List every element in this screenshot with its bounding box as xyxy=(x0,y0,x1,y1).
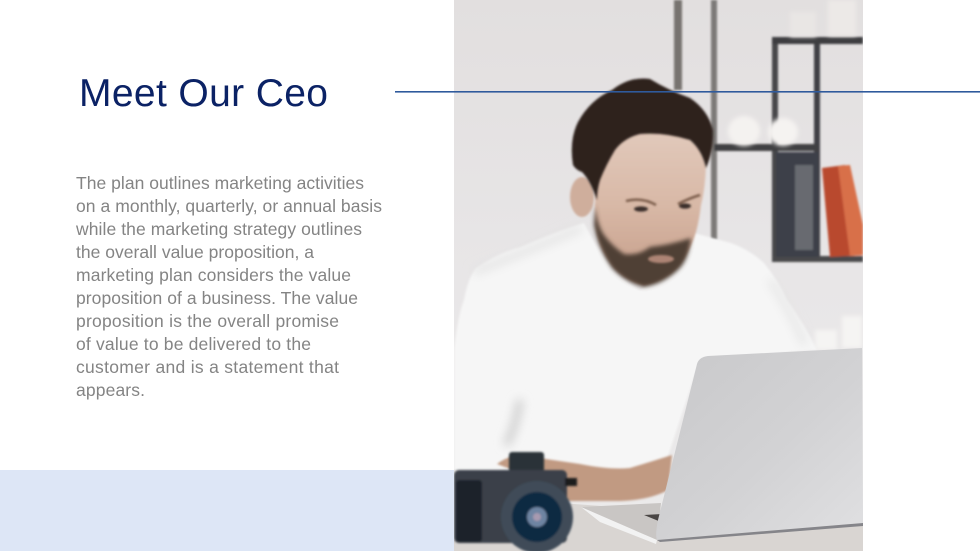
title: Meet Our Ceo xyxy=(79,72,328,115)
camera xyxy=(454,452,577,551)
body text: on a monthly, quarterly, or annual basis xyxy=(76,196,382,216)
body text: proposition is the overall promise xyxy=(76,311,339,331)
keyboard notch xyxy=(644,514,660,521)
sweater xyxy=(454,223,817,480)
forearm and hand xyxy=(497,455,672,501)
body text xyxy=(75,173,382,400)
eyes and brows xyxy=(626,195,700,212)
wall xyxy=(454,0,863,551)
shelf objects xyxy=(728,0,862,350)
table xyxy=(454,503,863,551)
photo: CEO at laptop xyxy=(454,0,863,551)
ear xyxy=(570,177,594,217)
body text: the overall value proposition, a xyxy=(76,242,314,262)
body text: marketing plan considers the value xyxy=(76,265,351,285)
shelf xyxy=(674,0,863,262)
body text: while the marketing strategy outlines xyxy=(75,219,362,239)
sweater fold shadows xyxy=(474,228,805,445)
face xyxy=(595,128,706,285)
mouth xyxy=(648,255,674,263)
laptop lid xyxy=(656,348,863,540)
beard xyxy=(594,205,691,287)
body text: The plan outlines marketing activities xyxy=(76,173,364,193)
laptop base xyxy=(581,503,661,540)
accent block xyxy=(0,470,454,551)
body text: appears. xyxy=(76,380,145,400)
hair xyxy=(572,78,713,200)
body text: of value to be delivered to the xyxy=(76,334,311,354)
body text: proposition of a business. The value xyxy=(76,288,358,308)
body text: customer and is a statement that xyxy=(76,357,339,377)
divider line xyxy=(395,91,980,93)
